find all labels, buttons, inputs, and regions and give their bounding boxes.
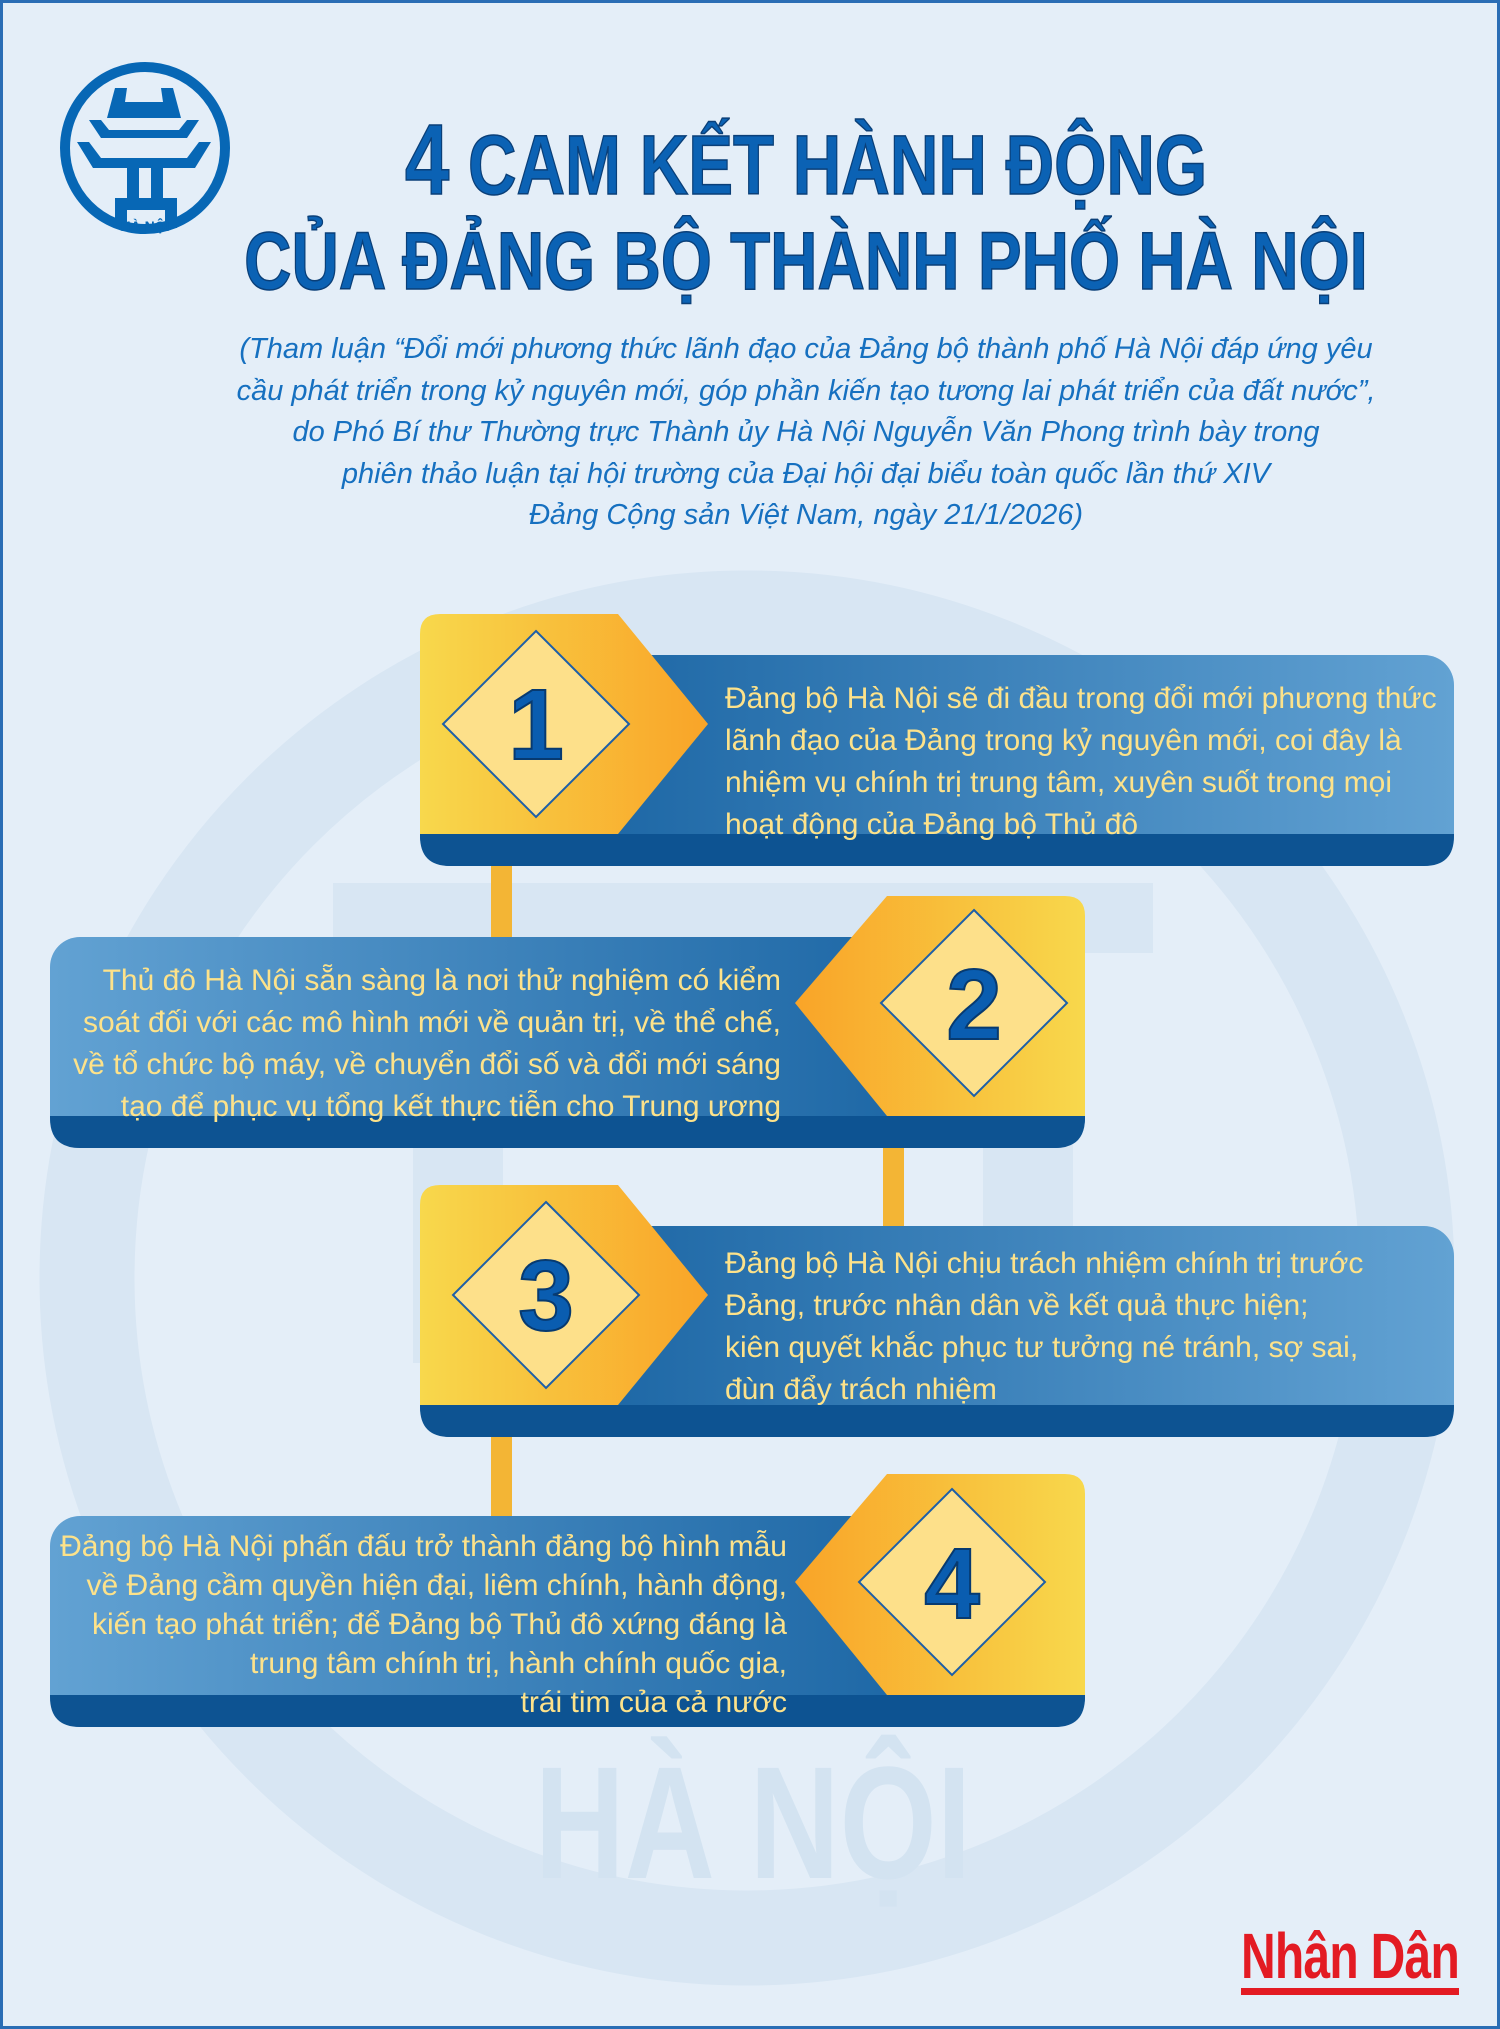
- logo: Nhân Dân: Nhân Dân: [1241, 1920, 1459, 1992]
- text 2: Thủ đô Hà Nội sẵn sàng là nơi thử nghiệm có kiểm: [103, 964, 781, 997]
- card 2: [50, 896, 1085, 1148]
- subtitle: [237, 333, 1375, 531]
- subtitle: phiên thảo luận tại hội trường của Đại hội đại biểu toàn quốc lần thứ XIV: [342, 458, 1270, 490]
- text 2: tạo để phục vụ tổng kết thực tiễn cho Trung ương: [121, 1090, 781, 1123]
- text 1: Đảng bộ Hà Nội sẽ đi đầu trong đổi mới phương thức: [725, 682, 1437, 715]
- text 4: kiến tạo phát triển; để Đảng bộ Thủ đô xứng đáng là: [92, 1608, 787, 1641]
- subtitle: (Tham luận “Đổi mới phương thức lãnh đạo của Đảng bộ thành phố Hà Nội đáp ứng yêu: [239, 333, 1373, 365]
- text 4: trái tim của cả nước: [520, 1686, 787, 1719]
- card 4: 4: [924, 1528, 980, 1640]
- text 4: về Đảng cầm quyền hiện đại, liêm chính, hành động,: [87, 1569, 787, 1602]
- text 3: Đảng, trước nhân dân về kết quả thực hiện;: [725, 1289, 1309, 1322]
- connector 3-4: [491, 1434, 512, 1520]
- text 3: Đảng bộ Hà Nội chịu trách nhiệm chính trị trước: [725, 1247, 1363, 1280]
- text 2: soát đối với các mô hình mới về quản trị, về thể chế,: [83, 1006, 781, 1039]
- text 3: đùn đẩy trách nhiệm: [725, 1373, 997, 1406]
- card 1: 1: [508, 669, 564, 781]
- title: [244, 104, 1368, 307]
- subtitle: do Phó Bí thư Thường trực Thành ủy Hà Nội Nguyễn Văn Phong trình bày trong: [292, 416, 1320, 448]
- text 1: lãnh đạo của Đảng trong kỷ nguyên mới, coi đây là: [725, 724, 1402, 757]
- text 4: Đảng bộ Hà Nội phấn đấu trở thành đảng bộ hình mẫu: [60, 1530, 787, 1563]
- text 2: về tổ chức bộ máy, về chuyển đổi số và đổi mới sáng: [73, 1048, 781, 1081]
- text 1: [725, 682, 1437, 841]
- text 2: [73, 964, 781, 1123]
- text 3: [725, 1247, 1363, 1406]
- watermark background: HÀ NỘI: [535, 1734, 971, 1913]
- card 1: [420, 614, 1454, 866]
- card 2: 2: [946, 949, 1002, 1061]
- subtitle: Đảng Cộng sản Việt Nam, ngày 21/1/2026): [529, 499, 1083, 531]
- text 4: trung tâm chính trị, hành chính quốc gia,: [250, 1647, 787, 1680]
- subtitle: cầu phát triển trong kỷ nguyên mới, góp phần kiến tạo tương lai phát triển của đất nước”,: [237, 374, 1375, 406]
- title: CỦA ĐẢNG BỘ THÀNH PHỐ HÀ NỘI: [244, 216, 1368, 307]
- icon: Hanoi logo: [60, 62, 230, 234]
- text 3: kiên quyết khắc phục tư tưởng né tránh, sợ sai,: [725, 1331, 1358, 1364]
- text 1: hoạt động của Đảng bộ Thủ đô: [725, 808, 1138, 841]
- text 1: nhiệm vụ chính trị trung tâm, xuyên suốt trong mọi: [725, 766, 1392, 799]
- card 3: 3: [518, 1240, 574, 1352]
- connector 2-3: [883, 1145, 904, 1231]
- card 3: [420, 1185, 1454, 1437]
- card 4: [50, 1474, 1085, 1727]
- connector 1-2: [491, 863, 512, 941]
- text 4: [60, 1530, 787, 1719]
- title: 4 CAM KẾT HÀNH ĐỘNG: [405, 104, 1207, 216]
- icon: Hanoi logo: HÀ NỘI: [120, 217, 170, 234]
